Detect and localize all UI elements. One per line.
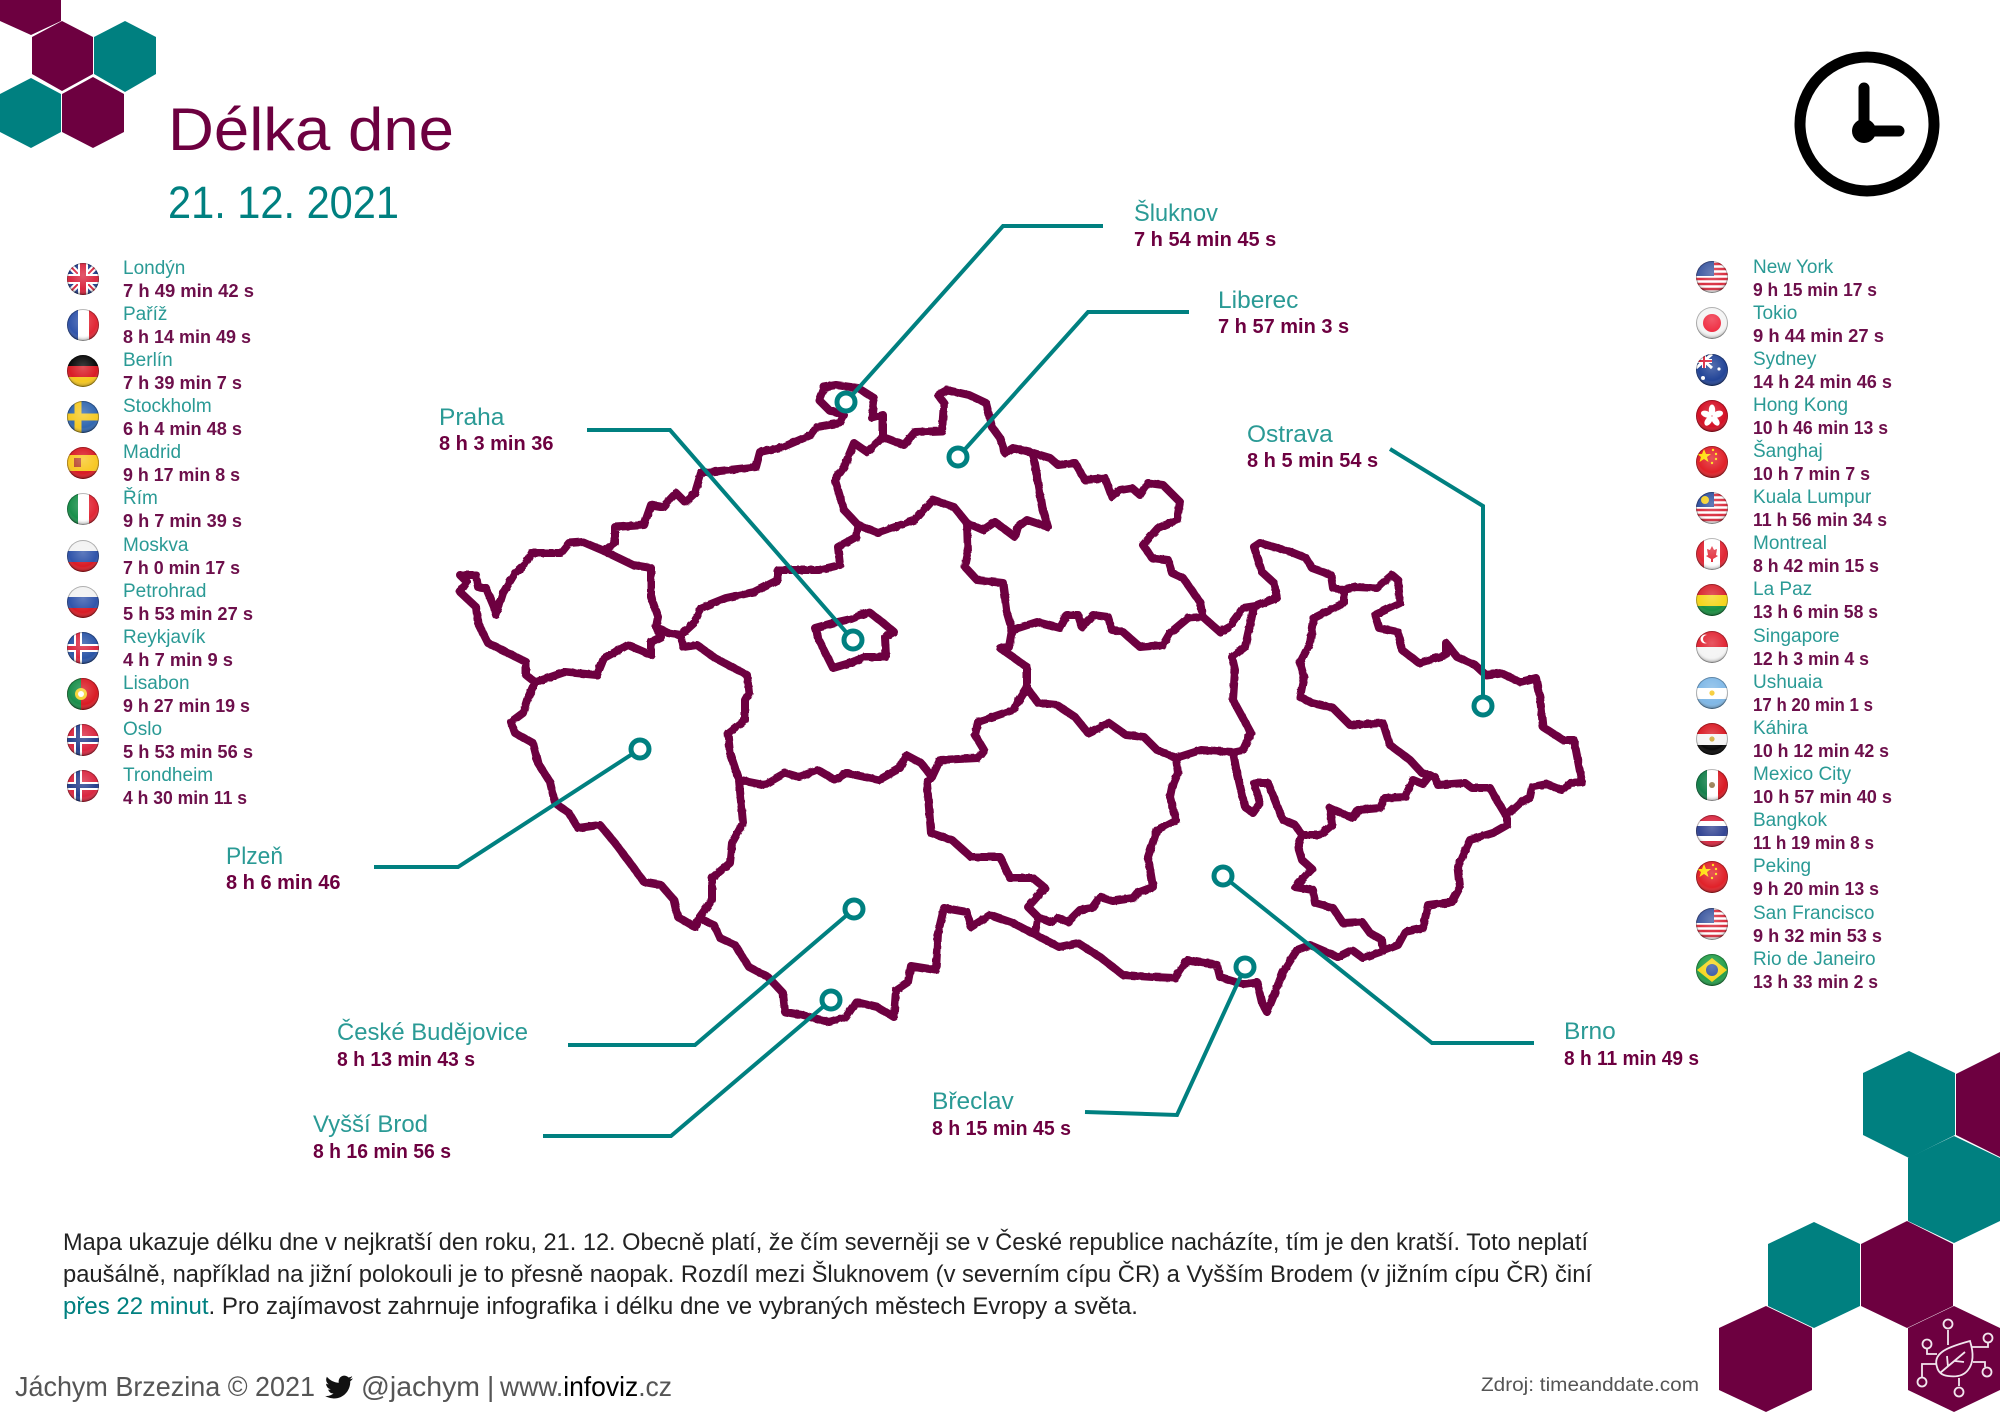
callout: Ostrava bbox=[1247, 421, 1492, 715]
row: Bangkok: Bangkok bbox=[1753, 810, 1827, 831]
icon: clock bbox=[1800, 57, 1934, 191]
row: Moskva: Moskva bbox=[123, 535, 189, 556]
row: Paříž: 8 h 14 min 49 s bbox=[123, 326, 251, 347]
callout: Ostrava: Ostrava bbox=[1247, 421, 1333, 448]
icon: leaf with circuit nodes bbox=[1918, 1320, 1992, 1396]
footer: author credit bbox=[15, 1371, 672, 1402]
row: San Francisco bbox=[1696, 905, 1882, 942]
row: Trondheim: 4 h 30 min 11 s bbox=[123, 787, 247, 808]
hexagons: bottom right decoration bbox=[1719, 1051, 2000, 1412]
row: New York: New York bbox=[1753, 257, 1834, 278]
row: La Paz: La Paz bbox=[1753, 579, 1812, 600]
row: La Paz bbox=[1696, 582, 1878, 618]
row: Madrid: Madrid bbox=[123, 442, 181, 463]
row: Trondheim: Trondheim bbox=[123, 765, 213, 786]
row: Sydney bbox=[1696, 351, 1892, 388]
callout: Brno: 8 h 11 min 49 s bbox=[1564, 1048, 1699, 1070]
row: Řím: 9 h 7 min 39 s bbox=[123, 510, 242, 531]
row: Sydney: 14 h 24 min 46 s bbox=[1753, 371, 1892, 392]
row: Bangkok: 11 h 19 min 8 s bbox=[1753, 832, 1874, 853]
row: Petrohrad bbox=[67, 583, 252, 620]
row: Reykjavík bbox=[67, 629, 232, 666]
footer: author credit: @jachym bbox=[361, 1371, 480, 1402]
callout: Břeclav: Břeclav bbox=[932, 1088, 1014, 1115]
row: Stockholm: Stockholm bbox=[123, 396, 212, 417]
row: Peking bbox=[1696, 858, 1878, 895]
map of Czech regions bbox=[460, 385, 1582, 1022]
text block: description bbox=[63, 1228, 1592, 1320]
row: Madrid: 9 h 17 min 8 s bbox=[123, 464, 240, 485]
row: Rio de Janeiro bbox=[1696, 951, 1878, 988]
hexagons: top left decoration bbox=[0, 0, 156, 148]
callout: Liberec bbox=[949, 287, 1349, 466]
row: Londýn bbox=[67, 260, 254, 297]
text block: description: paušálně, například na jižní polokouli je to přesně naopak. Rozdíl mezi Šluknovem (v severním cípu ČR) a Vyšším Brodem (v jižním cípu ČR) činí bbox=[63, 1260, 1592, 1288]
row: Kuala Lumpur: Kuala Lumpur bbox=[1753, 487, 1872, 508]
row: Paříž bbox=[67, 306, 250, 343]
row: Stockholm: 6 h 4 min 48 s bbox=[123, 418, 242, 439]
callout: Liberec: Liberec bbox=[1218, 287, 1298, 314]
callout: Břeclav bbox=[932, 958, 1254, 1140]
callout: Plzeň: 8 h 6 min 46 bbox=[226, 872, 340, 894]
callout: Brno bbox=[1214, 867, 1699, 1070]
row: San Francisco: 9 h 32 min 53 s bbox=[1753, 925, 1882, 946]
row: Ushuaia bbox=[1696, 674, 1872, 711]
footer: author credit: Jáchym Brzezina © 2021 bbox=[15, 1371, 315, 1402]
text block: description: přes 22 minut. Pro zajímavost zahrnuje infografika i délku dne ve vybraných městech Evropy a světa. bbox=[63, 1293, 1138, 1320]
row: Oslo: 5 h 53 min 56 s bbox=[123, 741, 253, 762]
row: Reykjavík: Reykjavík bbox=[123, 627, 206, 648]
row: Tokio bbox=[1696, 305, 1884, 342]
row: Lisabon: 9 h 27 min 19 s bbox=[123, 695, 250, 716]
callout: Vyšší Brod: 8 h 16 min 56 s bbox=[313, 1141, 451, 1163]
row: Rio de Janeiro: 13 h 33 min 2 s bbox=[1753, 971, 1878, 992]
row: Ushuaia: 17 h 20 min 1 s bbox=[1753, 694, 1873, 715]
row: Oslo: Oslo bbox=[123, 719, 162, 740]
row: San Francisco: San Francisco bbox=[1753, 903, 1874, 924]
row: Hong Kong: Hong Kong bbox=[1753, 395, 1848, 416]
callout: Praha: Praha bbox=[439, 404, 505, 431]
row: Ushuaia: Ushuaia bbox=[1753, 672, 1823, 693]
panel: European cities bbox=[67, 258, 254, 808]
row: Mexico City: 10 h 57 min 40 s bbox=[1753, 786, 1892, 807]
row: Oslo bbox=[67, 721, 252, 758]
row: New York bbox=[1696, 259, 1876, 296]
row: Šanghaj: Šanghaj bbox=[1753, 440, 1823, 462]
row: Řím bbox=[67, 487, 242, 531]
row: Londýn: Londýn bbox=[123, 258, 185, 279]
row: Montreal: 8 h 42 min 15 s bbox=[1753, 555, 1879, 576]
row: Tokio: Tokio bbox=[1753, 303, 1797, 324]
row: Berlín: Berlín bbox=[123, 350, 173, 371]
row: Paříž: Paříž bbox=[123, 304, 167, 325]
row: Montreal: Montreal bbox=[1753, 533, 1827, 554]
row: Petrohrad: Petrohrad bbox=[123, 581, 206, 602]
row: Singapore bbox=[1696, 628, 1868, 665]
row: Trondheim bbox=[67, 767, 246, 804]
callout: Vyšší Brod: Vyšší Brod bbox=[313, 1111, 428, 1138]
row: Berlín: 7 h 39 min 7 s bbox=[123, 372, 242, 393]
row: Peking: 9 h 20 min 13 s bbox=[1753, 878, 1879, 899]
row: Reykjavík: 4 h 7 min 9 s bbox=[123, 649, 233, 670]
callout: Vyšší Brod bbox=[313, 991, 840, 1163]
row: La Paz: 13 h 6 min 58 s bbox=[1753, 601, 1878, 622]
callout: Brno: Brno bbox=[1564, 1018, 1616, 1045]
icon: twitter bird bbox=[325, 1376, 353, 1398]
callout: Šluknov bbox=[837, 199, 1276, 411]
row: Petrohrad: 5 h 53 min 27 s bbox=[123, 603, 253, 624]
callout: Praha bbox=[439, 404, 862, 649]
text block: description: Mapa ukazuje délku dne v nejkratší den roku, 21. 12. Obecně platí, že čím severněji se v České republice nacházíte, tím je den kratší. Toto neplatí bbox=[63, 1228, 1588, 1256]
row: Berlín bbox=[67, 352, 242, 389]
row: Mexico City bbox=[1696, 766, 1892, 803]
panel: world cities bbox=[1696, 257, 1892, 992]
row: Madrid bbox=[67, 444, 240, 481]
callout: České Budějovice bbox=[337, 900, 863, 1071]
callout: Plzeň: Plzeň bbox=[226, 843, 283, 870]
callout: České Budějovice: České Budějovice bbox=[337, 1018, 528, 1046]
row: Káhira: Káhira bbox=[1753, 718, 1808, 739]
row: Kuala Lumpur bbox=[1696, 489, 1886, 526]
row: Hong Kong bbox=[1696, 398, 1888, 434]
row: Řím: Řím bbox=[123, 487, 158, 509]
footer: author credit: | bbox=[487, 1371, 494, 1402]
row: New York: 9 h 15 min 17 s bbox=[1753, 279, 1877, 300]
row: Kuala Lumpur: 11 h 56 min 34 s bbox=[1753, 509, 1887, 530]
row: Tokio: 9 h 44 min 27 s bbox=[1753, 325, 1884, 346]
callout: Praha: 8 h 3 min 36 bbox=[439, 433, 554, 455]
row: Káhira bbox=[1696, 720, 1888, 757]
row: Sydney: Sydney bbox=[1753, 349, 1817, 370]
row: Stockholm bbox=[67, 398, 242, 435]
row: Lisabon bbox=[67, 675, 250, 712]
row: Moskva bbox=[67, 537, 240, 574]
row: Peking: Peking bbox=[1753, 856, 1811, 877]
callout: Břeclav: 8 h 15 min 45 s bbox=[932, 1118, 1071, 1140]
callout: Šluknov: Šluknov bbox=[1134, 199, 1219, 227]
callout: Liberec: 7 h 57 min 3 s bbox=[1218, 316, 1349, 338]
callout: Šluknov: 7 h 54 min 45 s bbox=[1134, 229, 1276, 251]
row: Hong Kong: 10 h 46 min 13 s bbox=[1753, 417, 1888, 438]
source note: Zdroj: timeanddate.com bbox=[1481, 1374, 1699, 1396]
row: Singapore: 12 h 3 min 4 s bbox=[1753, 648, 1869, 669]
row: Mexico City: Mexico City bbox=[1753, 764, 1852, 785]
callout: Plzeň bbox=[226, 740, 649, 894]
footer: author credit: www.infoviz.cz bbox=[499, 1371, 672, 1402]
row: Bangkok bbox=[1696, 812, 1874, 849]
callout: České Budějovice: 8 h 13 min 43 s bbox=[337, 1049, 475, 1071]
title: Délka dne bbox=[168, 96, 454, 163]
row: Káhira: 10 h 12 min 42 s bbox=[1753, 740, 1889, 761]
row: Šanghaj: 10 h 7 min 7 s bbox=[1753, 463, 1870, 484]
row: Londýn: 7 h 49 min 42 s bbox=[123, 280, 254, 301]
row: Singapore: Singapore bbox=[1753, 626, 1840, 647]
date subtitle: 21. 12. 2021 bbox=[168, 177, 399, 228]
row: Moskva: 7 h 0 min 17 s bbox=[123, 557, 240, 578]
callout: Ostrava: 8 h 5 min 54 s bbox=[1247, 450, 1378, 472]
row: Montreal bbox=[1696, 535, 1878, 572]
row: Šanghaj bbox=[1696, 440, 1870, 484]
row: Lisabon: Lisabon bbox=[123, 673, 190, 694]
row: Rio de Janeiro: Rio de Janeiro bbox=[1753, 949, 1876, 970]
